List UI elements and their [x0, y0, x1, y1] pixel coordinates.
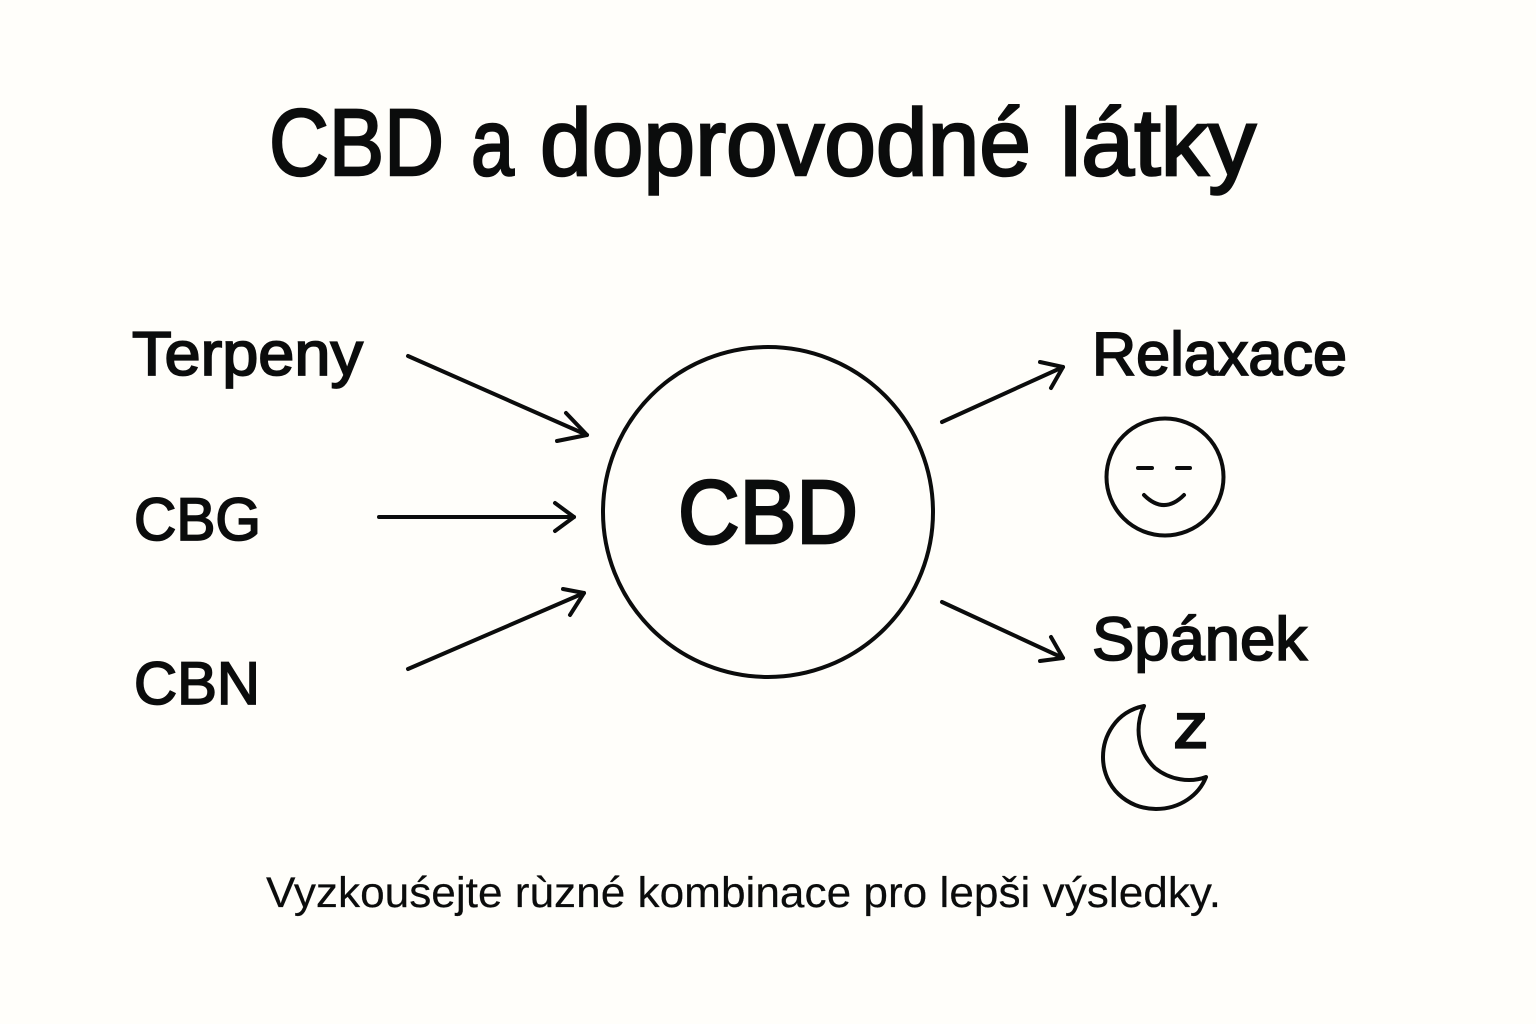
icon: moon with Z: Z [1174, 703, 1207, 759]
title [269, 90, 1256, 196]
title: doprovodné [540, 90, 1031, 196]
footer text: Vyzkouśejte rùzné kombinace pro lepši výsledky. [266, 869, 1221, 917]
arrow: Terpeny to CBD [408, 356, 587, 441]
title: látky [1060, 90, 1256, 196]
input label: Terpeny: Terpeny [132, 320, 363, 389]
title: CBD [269, 90, 444, 196]
arrow: CBD to Spánek [942, 602, 1063, 661]
icon: moon with Z [1103, 703, 1207, 809]
title: a [471, 90, 514, 196]
input label: CBG: CBG [134, 486, 261, 553]
arrow: CBG to CBD [379, 503, 574, 531]
icon: smiling face [1106, 418, 1224, 536]
arrow: CBD to Relaxace [942, 362, 1063, 422]
output label: Relaxace: Relaxace [1092, 320, 1347, 388]
central circle: CBD [603, 347, 933, 677]
central circle: CBD: CBD [678, 463, 858, 563]
input label: CBN: CBN [134, 650, 260, 717]
arrow: CBN to CBD [408, 589, 584, 669]
output label: Spánek: Spánek [1092, 605, 1308, 673]
